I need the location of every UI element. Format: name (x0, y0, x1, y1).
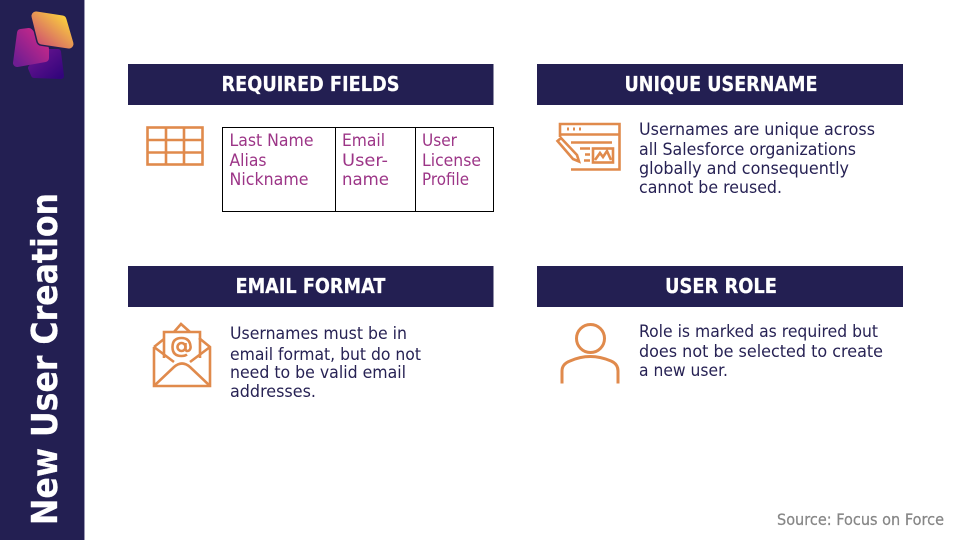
table of fields: Profile (422, 170, 469, 189)
text block: all Salesforce organizations (639, 140, 856, 159)
heading: required fields (128, 64, 494, 105)
table of fields: User (422, 131, 457, 150)
text block (639, 120, 875, 197)
heading: email format (128, 266, 494, 307)
text block (230, 324, 421, 401)
icon: person (562, 324, 618, 384)
logo (17, 16, 69, 76)
text block: addresses. (230, 382, 316, 401)
text block: email format, but do not (230, 345, 421, 364)
table of fields: License (422, 151, 481, 170)
panel: required fields (128, 64, 494, 212)
source note: Source: Focus on Force (777, 510, 944, 529)
text block: need to be valid email (230, 363, 406, 382)
heading: required fields: REQUIRED FIELDS (222, 72, 400, 96)
heading: email format: EMAIL FORMAT (236, 274, 386, 298)
table of fields: name (342, 170, 389, 189)
text block: a new user. (639, 361, 728, 380)
table of fields: Last Name (230, 131, 314, 150)
table of fields: Nickname (230, 170, 308, 189)
icon: table grid (148, 128, 202, 164)
sidebar title: New User Creation (25, 193, 66, 525)
text block (639, 322, 883, 380)
panel: user role (537, 266, 903, 384)
panel: unique username (537, 64, 903, 197)
text block: globally and consequently (639, 159, 849, 178)
heading: user role: USER ROLE (665, 274, 777, 298)
heading: unique username: UNIQUE USERNAME (624, 72, 818, 96)
text block: Usernames are unique across (639, 120, 875, 139)
heading: unique username (537, 64, 903, 105)
text block: Role is marked as required but (639, 322, 878, 341)
text block: cannot be reused. (639, 178, 782, 197)
heading: user role (537, 266, 903, 307)
table of fields (222, 128, 494, 212)
icon: browser window with pencil (558, 124, 620, 170)
table of fields: Email (342, 131, 385, 150)
table of fields: User- (342, 151, 388, 170)
text block: does not be selected to create (639, 342, 883, 361)
table of fields: Alias (230, 151, 266, 170)
panel: email format (128, 266, 494, 401)
sidebar (0, 0, 85, 540)
text block: Usernames must be in (230, 324, 407, 343)
icon: open envelope with at sign (154, 324, 210, 386)
